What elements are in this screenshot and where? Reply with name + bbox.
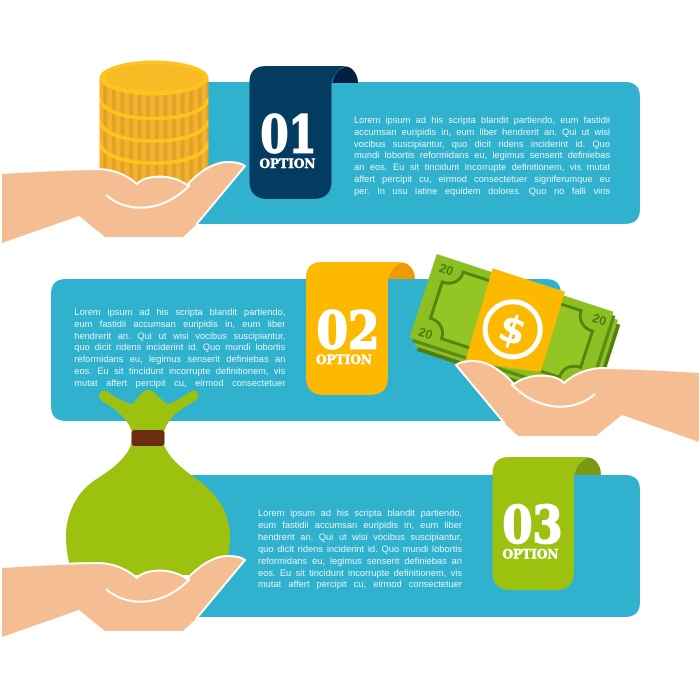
icon: coin stack xyxy=(99,60,209,190)
icon: hand 2 xyxy=(456,361,699,442)
text: option 1 body: an eos. Eu sit tincidunt incorrupte definitionem, vis mutat xyxy=(354,162,610,172)
text: option 2 body: hendrerit an. Qui ut wisi vocibus suscipiantur, xyxy=(74,330,285,340)
ribbon: option 2 xyxy=(306,262,415,395)
text: option 3 body: Lorem ipsum ad his scripta blandit partiendo, xyxy=(258,508,462,518)
text: option 3 body: eos. Eu sit tincidunt incorrupte definitionem, vis xyxy=(258,568,462,578)
text: option 1 body: accumsan euripidis in, eum liber hendrerit an. Qui ut wisi xyxy=(354,127,610,137)
text: option 2 body: eos. Eu sit tincidunt incorrupte definitionem, vis xyxy=(74,366,285,376)
text: option 2 body xyxy=(74,307,285,393)
text: option 1 body: per. In usu latine equidem dolores. Quo no falli viris xyxy=(354,186,610,196)
text: option 1 body: Lorem ipsum ad his scripta blandit partiendo, eum fastidii xyxy=(354,115,610,125)
text: option 1 body: vocibus suscipiantur, quo dicit ridens inciderint id. Quo xyxy=(354,138,610,148)
icon: banknotes xyxy=(409,254,620,409)
icon: banknotes: 20 xyxy=(417,325,434,342)
text: option 3 body: quo dicit ridens inciderint id. Quo mundi lobortis xyxy=(258,544,462,554)
text: option 1 body xyxy=(354,115,610,201)
text: option 1 body: mundi lobortis reformidans eu, legimus senserit definiebas xyxy=(354,150,610,160)
text: option 2 body: eum fastidii accumsan euripidis in, eum liber xyxy=(74,319,285,329)
text: option 2 body: reformidans eu, legimus senserit definiebas an xyxy=(74,354,285,364)
icon: hand 1 xyxy=(2,162,245,243)
icon: money bag xyxy=(66,390,230,575)
number: 03: 03 xyxy=(502,496,562,556)
icon: hand 3 xyxy=(2,556,245,637)
panel: option 3 xyxy=(190,475,640,617)
icon: banknotes: $ xyxy=(493,305,532,355)
label: option: OPTION xyxy=(316,353,372,368)
label: option: OPTION xyxy=(260,157,316,172)
panel: option 2 xyxy=(51,279,561,421)
ribbon: option 1 xyxy=(250,66,358,199)
icon: banknotes: 20 xyxy=(437,261,455,279)
text: option 3 body xyxy=(258,508,462,594)
ribbon: option 3 xyxy=(492,457,601,590)
text: option 1 body: affert percipit cu, eirmod consectetuer signiferumque eu xyxy=(354,174,610,184)
text: option 3 body: hendrerit an. Qui ut wisi vocibus suscipiantur, xyxy=(258,532,462,542)
text: option 3 body: eum fastidii accumsan euripidis in, eum liber xyxy=(258,520,462,530)
label: option: OPTION xyxy=(502,548,559,562)
text: option 3 body: reformidans eu, legimus senserit definiebas an xyxy=(258,556,462,566)
number: 02: 02 xyxy=(316,302,380,362)
text: option 2 body: mutat affert percipit cu, eirmod consectetuer xyxy=(74,378,285,388)
number: 01: 01 xyxy=(260,106,316,166)
text: option 3 body: mutat affert percipit cu, eirmod consectetuer xyxy=(258,579,462,589)
text: option 2 body: Lorem ipsum ad his scripta blandit partiendo, xyxy=(74,307,285,317)
icon: banknotes: 20 xyxy=(591,311,608,329)
text: option 2 body: quo dicit ridens inciderint id. Quo mundi lobortis xyxy=(74,342,285,352)
panel: option 1 xyxy=(197,82,640,224)
